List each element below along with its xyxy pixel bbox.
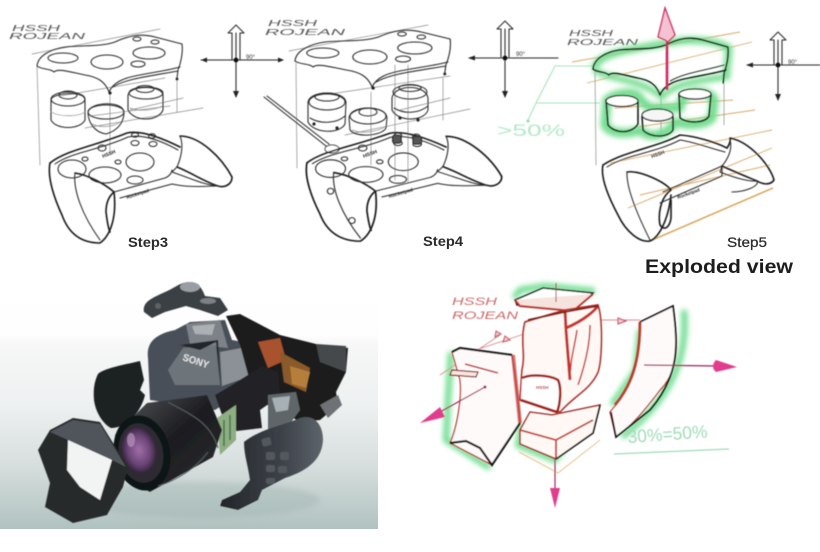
lens barrel — [107, 395, 222, 496]
panel: step 3 sketch — [9, 23, 232, 243]
pink upward arrow — [658, 8, 675, 90]
diagonal pink guide lines — [440, 318, 640, 375]
logo label: step 5: ROJEAN — [567, 37, 640, 47]
photo backdrop — [0, 280, 378, 529]
camera body grey shell — [148, 320, 262, 410]
red logo label — [452, 296, 518, 322]
axis icon: step 5: 90° — [788, 60, 798, 66]
three plain cylinders: step 5 — [606, 89, 711, 136]
lens hood — [38, 418, 128, 523]
game controller: step 3 — [49, 132, 232, 243]
red logo label: HSSH — [452, 296, 497, 308]
floor shadow — [80, 482, 320, 518]
logo label: step 4: HSSH — [268, 18, 319, 28]
central box body — [520, 305, 601, 412]
left pink arrow — [420, 386, 486, 423]
axis icon: step 3 — [201, 25, 284, 98]
heading: exploded view: Exploded view — [645, 257, 793, 278]
panel: red and green box exploded sketch — [420, 283, 737, 508]
central box body: HSSH — [536, 385, 549, 390]
green equation note: 30%=50% — [627, 421, 708, 447]
panel: step 4 sketch — [264, 18, 502, 241]
camera top control plate — [144, 282, 228, 318]
left curved panel — [450, 348, 520, 465]
green highlight: shell and cylinders — [594, 40, 729, 135]
game controller: step 4 — [306, 133, 502, 241]
bottom pink arrow — [550, 458, 560, 508]
controller body: step 5: HSSH — [650, 149, 666, 160]
step 5 caption: Step5 — [727, 234, 767, 250]
rear internals with orange flex boards — [226, 314, 348, 422]
top shell: step 4 — [295, 30, 450, 90]
construction lines: step 3 — [32, 29, 203, 165]
axis icon: step 4 — [468, 21, 558, 98]
controller body: step 5 — [602, 135, 774, 241]
mid optics block — [215, 366, 300, 432]
logo label: step 3: HSSH — [12, 23, 62, 33]
right pink arrow — [644, 360, 737, 372]
three cylinders: step 3 — [51, 86, 163, 134]
step 3 caption: Step3 — [128, 234, 168, 250]
right curved panel — [610, 306, 676, 437]
logo label: step 5 — [567, 28, 640, 47]
axis icon: step 5 — [746, 32, 820, 101]
logo label: step 4: ROJEAN — [265, 27, 347, 37]
logo label: step 4 — [265, 18, 347, 37]
top slab — [515, 283, 593, 311]
step 4 caption: Step4 — [423, 233, 463, 249]
green highlight: box parts — [446, 286, 685, 468]
top shell: step 5 — [593, 38, 728, 95]
logo label: step 3 — [9, 23, 87, 41]
axis icon: step 3: 90° — [246, 55, 256, 61]
hand grip with buttons — [220, 417, 323, 510]
axis icon: step 4: 90° — [516, 52, 526, 58]
lower box — [519, 405, 600, 473]
panel: step 5 sketch — [567, 8, 774, 241]
green equation note — [614, 421, 729, 454]
construction lines: step 4 — [289, 25, 470, 182]
callout: green over 50 percent — [497, 66, 600, 140]
panel: exploded camera photo — [0, 280, 378, 529]
red logo label: ROJEAN — [452, 310, 518, 322]
three detailed cylinders: step 4 — [308, 84, 428, 135]
top shell: step 3 — [37, 35, 182, 95]
camera parts — [38, 282, 348, 523]
callout: green over 50 percent: >50% — [497, 121, 565, 140]
logo label: step 5: HSSH — [569, 28, 615, 38]
orange guide lines: step 5 — [572, 32, 773, 241]
controller body: step 5: Rocketpad — [677, 187, 701, 200]
logo label: step 3: ROJEAN — [9, 31, 87, 41]
left door flap — [94, 361, 145, 428]
sony wordmark: SONY — [181, 352, 210, 371]
pen pointer: step 4 — [264, 96, 339, 153]
green circuit board — [217, 405, 236, 455]
